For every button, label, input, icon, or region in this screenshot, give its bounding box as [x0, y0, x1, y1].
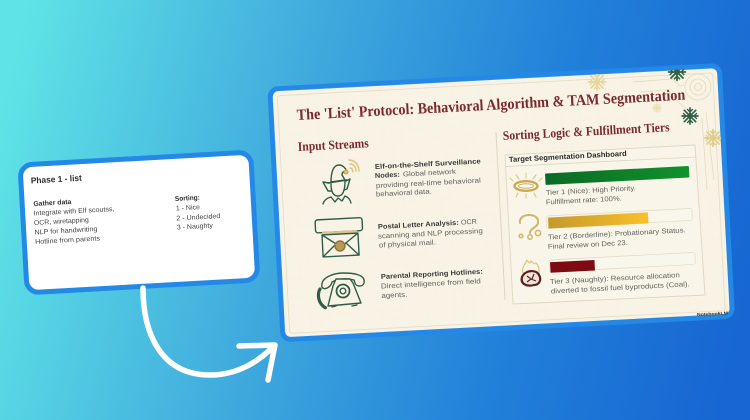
text: tier 1: Tier 1 (Nice): High Priority. [546, 185, 636, 197]
bar: tier 3 [549, 252, 695, 273]
text: tier 1 [546, 185, 636, 206]
icon: halo [510, 173, 542, 198]
arrow: note card to protocol slide [143, 288, 275, 380]
text: postal letter analysis: OCR [461, 219, 477, 227]
gather data text block: OCR, wiretapping [34, 217, 89, 227]
heading: sorting logic: Sorting Logic & Fulfillment Tiers [502, 119, 670, 143]
icon: elf [323, 160, 359, 204]
notebooklm watermark: NotebookLM [697, 310, 729, 317]
title: The 'List' Protocol: Behavioral Algorithm & TAM Segmentation [296, 87, 686, 124]
text: postal letter analysis [378, 219, 483, 249]
text: tier 3: Tier 3 (Naughty): Resource allocation [550, 272, 680, 286]
sorting text block: 3 - Naughty [177, 222, 214, 231]
gather data text block [33, 199, 115, 246]
text: postal letter analysis: Postal Letter Analysis: [378, 220, 459, 231]
text: surveillance nodes: Nodes: [375, 172, 400, 180]
text: tier 1: Fulfillment rate: 100%. [546, 196, 622, 206]
text: parental hotlines: agents. [381, 292, 408, 300]
icon: rotary telephone [318, 273, 364, 308]
text: tier 3: diverted to fossil fuel byproducts (Coal). [551, 281, 690, 295]
text: surveillance nodes: behavioral data. [376, 189, 432, 198]
dashboard heading: Target Segmentation Dashboard [509, 149, 627, 164]
decorative circuit corner [633, 74, 714, 190]
text: tier 2 [548, 227, 686, 251]
text: tier 2: Tier 2 (Borderline): Probationary Status. [548, 227, 686, 241]
icon: burning coal [522, 260, 540, 286]
bar: tier 1 [545, 166, 689, 185]
sorting text block [175, 195, 221, 231]
slide frame [270, 66, 732, 340]
text: tier 2: Final review on Dec 23. [548, 240, 628, 251]
decorative snowflakes [589, 64, 721, 146]
column divider [496, 132, 505, 300]
sorting text block: 2 - Undecided [176, 213, 221, 222]
note card frame [20, 152, 258, 293]
icon: scanner and envelope [315, 218, 363, 257]
gather data text block: Integrate with Elf scoutss, [33, 206, 115, 217]
text: parental hotlines: Parental Reporting Hotlines: [381, 269, 483, 281]
text: postal letter analysis: of physical mail. [379, 240, 436, 249]
text: surveillance nodes: Elf-on-the-Shelf Surveillance [375, 158, 481, 171]
dashboard frame [505, 145, 705, 304]
text: parental hotlines: Direct intelligence from field [381, 278, 481, 290]
heading: input streams: Input Streams [297, 135, 369, 154]
gather data text block: Hotline from parents [35, 235, 101, 246]
text: surveillance nodes: Global network [403, 169, 457, 178]
text: tier 3 [550, 272, 690, 295]
panel: phase 1 note card [20, 152, 258, 293]
gather data text block: NLP for handwriting [34, 226, 98, 236]
text: surveillance nodes: providing real-time behavioral [376, 177, 481, 190]
gather data text block: Gather data [33, 199, 72, 208]
sorting text block: Sorting: [175, 195, 200, 203]
sorting text block: 1 - Nice [176, 204, 200, 212]
icon: question mark [519, 215, 541, 239]
panel: target segmentation dashboard [505, 145, 705, 304]
text: surveillance nodes [375, 158, 481, 198]
panel: the list protocol slide [270, 64, 732, 340]
text: parental hotlines [381, 269, 483, 300]
bar: tier 2 [546, 208, 692, 229]
text: postal letter analysis: scanning and NLP processing [378, 228, 483, 240]
note heading: Phase 1 - list [31, 173, 82, 185]
